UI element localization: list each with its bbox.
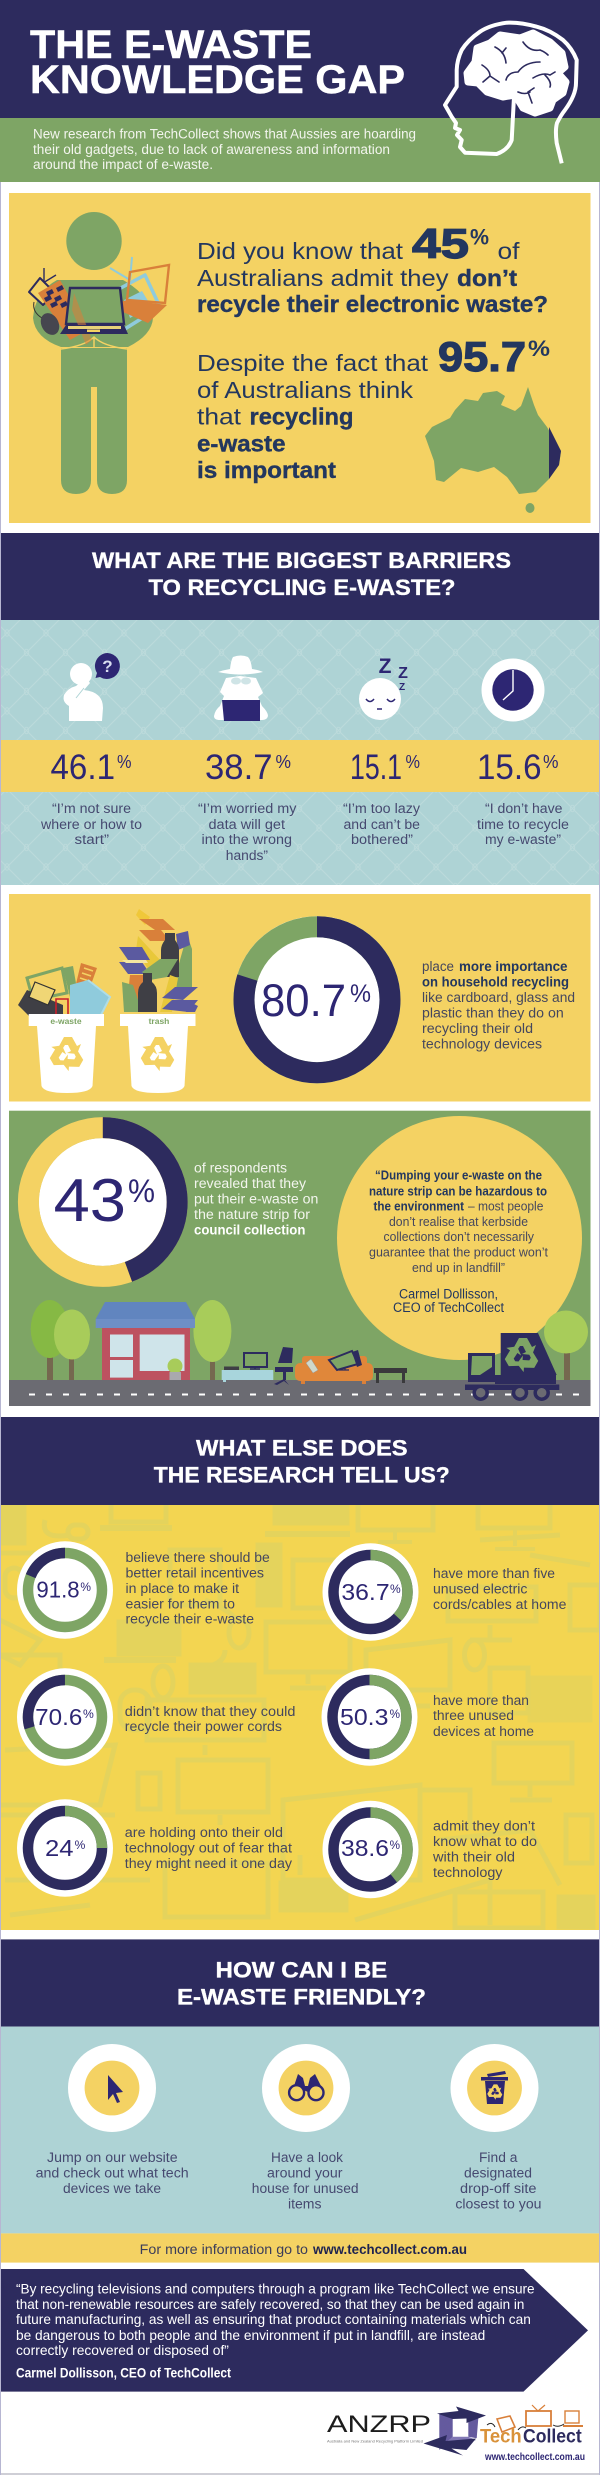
stat: 15.6	[477, 748, 569, 847]
caption: easier for them to	[126, 1596, 235, 1611]
quote: data will get	[208, 817, 285, 832]
caption: recycle their e-waste	[126, 1612, 254, 1627]
quote: time to recycle	[477, 817, 569, 832]
icon: sleeping face: Z	[379, 655, 392, 678]
icon: person wondering	[64, 653, 120, 721]
stat: 15.6: 15.6	[477, 748, 542, 787]
heading	[154, 1436, 450, 1488]
icon: sleeping face: Z	[398, 665, 408, 682]
callout: CEO quote: CEO of TechCollect	[393, 1300, 504, 1315]
step: drop-off: drop-off site	[460, 2181, 536, 2196]
icon: sleeping face	[359, 655, 408, 720]
heading band: what else	[0, 1417, 600, 1505]
text: 95.7 percent: Despite the fact that	[197, 350, 429, 376]
icon: sleeping face: Z	[399, 682, 405, 693]
stat: 50.3: %	[390, 1707, 400, 1721]
quote	[343, 801, 420, 847]
step: drop-off: closest to you	[455, 2196, 542, 2211]
logo: ANZRP: Australia and New Zealand Recycling Platform Limited	[327, 2440, 423, 2444]
icon: recycling bin	[450, 2044, 538, 2132]
step: website: Jump on our website	[47, 2150, 178, 2165]
heading: WHAT ELSE DOES	[196, 1436, 408, 1461]
caption: three unused	[433, 1708, 514, 1723]
text: 43 percent caption: put their e-waste on	[194, 1192, 318, 1207]
chart: 80.7 percent donut: %	[350, 980, 371, 1008]
icon: head with brain	[445, 23, 577, 163]
arrow: CEO quote	[0, 2269, 588, 2392]
quote: hands”	[226, 848, 268, 863]
dumped furniture	[222, 1347, 407, 1385]
caption	[433, 1693, 534, 1739]
icon: trash pile	[119, 909, 198, 1012]
text: 95.7 percent: recycling	[250, 404, 354, 430]
caption	[432, 1818, 537, 1880]
icon: trash bin	[120, 1014, 196, 1093]
map: Australia	[425, 387, 561, 513]
text: household recycling: more importance	[459, 959, 568, 974]
chart: 80.7 percent donut: 80.7	[261, 975, 346, 1026]
stat: 91.8: %	[80, 1580, 91, 1594]
intro text: around the impact of e-waste.	[33, 157, 213, 172]
intro text	[33, 126, 416, 172]
callout: CEO quote	[337, 1116, 582, 1360]
quote: my e-waste”	[485, 832, 561, 847]
step: drop-off	[450, 2044, 542, 2211]
text: household recycling: on household recycling	[422, 975, 569, 990]
stat: 15.1	[343, 748, 420, 847]
intro text: their old gadgets, due to lack of awareness and information	[33, 142, 390, 157]
text: 43 percent caption	[194, 1161, 318, 1238]
callout: CEO quote: nature strip can be hazardous to	[369, 1183, 547, 1198]
quote: where or how to	[40, 817, 142, 832]
panel: household recycling	[9, 894, 590, 1102]
heading: E-WASTE FRIENDLY?	[177, 1985, 426, 2010]
stat: 38.6: 38.6	[341, 1835, 389, 1861]
icon: person holding devices	[29, 212, 169, 494]
step: website: and check out what tech	[36, 2166, 189, 2180]
title: THE E-WASTE	[30, 23, 312, 67]
more information band: For more information go to	[140, 2242, 308, 2257]
panel: research findings	[0, 1498, 600, 1930]
arrow: CEO quote: “By recycling televisions and computers through a program like TechCollect we ensure	[16, 2281, 535, 2297]
caption: technology out of fear that	[125, 1840, 292, 1856]
caption: believe there should be	[126, 1550, 270, 1565]
stat: 70.6: 70.6	[35, 1704, 82, 1730]
step: drop-off: designated	[464, 2166, 532, 2180]
panel: how to help	[0, 2027, 600, 2233]
icon: e-waste bin: e-waste	[50, 1016, 82, 1026]
text: 43 percent caption: revealed that they	[194, 1176, 306, 1191]
stat band	[0, 740, 600, 792]
house	[96, 1302, 195, 1380]
icon: trash bin: trash	[149, 1016, 169, 1026]
stat: 38.7: 38.7	[205, 748, 272, 787]
heading: THE RESEARCH TELL US?	[154, 1463, 450, 1488]
icon: e-waste pile	[18, 963, 110, 1017]
logo: TechCollect: Tech	[480, 2427, 522, 2448]
text: 45 percent	[197, 220, 548, 317]
panel: barriers	[0, 620, 600, 885]
step: look around: items	[288, 2196, 322, 2211]
stat: 91.8: 91.8	[36, 1577, 80, 1603]
text: 95.7 percent: %	[528, 336, 550, 361]
caption	[433, 1566, 566, 1612]
stat: 36.7: 36.7	[341, 1579, 390, 1605]
icon: binoculars	[262, 2044, 350, 2132]
arrow: CEO quote: Carmel Dollisson, CEO of TechCollect	[16, 2365, 231, 2381]
text: household recycling: place	[422, 959, 454, 974]
caption: devices at home	[433, 1724, 534, 1739]
logo: TechCollect	[480, 2405, 585, 2463]
text: 45 percent: Australians admit they	[197, 265, 449, 291]
logo: ANZRP	[327, 2406, 486, 2456]
arrow: CEO quote: be dangerous to both people and the environment if put in landfill, are instead	[16, 2327, 485, 2343]
text: 45 percent: don’t	[457, 265, 517, 291]
text: 95.7 percent: is important	[197, 457, 336, 483]
quote: and can’t be	[344, 817, 420, 832]
caption: cords/cables at home	[433, 1597, 566, 1612]
caption: unused electric	[433, 1582, 528, 1597]
stat: 46.1: 46.1	[50, 748, 115, 787]
callout: CEO quote: – most people	[468, 1199, 543, 1214]
callout: CEO quote: guarantee that the product won’t	[369, 1245, 548, 1260]
chart: 43 percent donut: %	[128, 1173, 155, 1209]
arrow: CEO quote: that non-renewable resources are safely recovered, so that they can be used again in	[16, 2296, 524, 2312]
text: 95.7 percent: of Australians think	[197, 377, 413, 403]
icon: cursor	[68, 2044, 156, 2132]
icon: person wondering: ?	[102, 657, 113, 676]
quote	[40, 801, 142, 847]
stat: 38.7: %	[276, 752, 291, 772]
callout: CEO quote: collections don’t necessarily	[384, 1229, 534, 1244]
callout: CEO quote: the environment	[374, 1199, 465, 1214]
caption	[126, 1550, 270, 1627]
text: 43 percent caption: the nature strip for	[194, 1207, 311, 1222]
step: website: devices we take	[63, 2181, 161, 2196]
callout: CEO quote: Carmel Dollisson,	[399, 1286, 498, 1301]
text: household recycling: plastic than they do on	[422, 1006, 564, 1021]
icon: clock	[482, 658, 544, 722]
stat: 36.7: %	[390, 1582, 401, 1596]
stat: 24	[17, 1799, 292, 1897]
stat: 38.7	[198, 748, 297, 863]
heading: HOW CAN I BE	[216, 1958, 387, 1983]
step: website	[36, 2044, 189, 2196]
panel: did you know	[9, 193, 590, 523]
panel: nature strip	[9, 1111, 590, 1406]
heading: TO RECYCLING E-WASTE?	[148, 575, 456, 600]
heading band: e-waste friendly	[0, 1939, 600, 2027]
trees	[31, 1300, 588, 1380]
icon: hacker at laptop	[214, 656, 268, 721]
quote: “I don’t have	[485, 801, 562, 816]
caption: technology	[433, 1865, 503, 1880]
heading: WHAT ARE THE BIGGEST BARRIERS	[92, 548, 511, 573]
illustration: street scene	[9, 1300, 590, 1406]
quote: “I’m not sure	[52, 801, 131, 816]
text: household recycling: recycling their old	[422, 1021, 533, 1036]
caption	[125, 1704, 295, 1734]
text: household recycling	[422, 959, 575, 1052]
quote: “I’m too lazy	[343, 801, 420, 816]
quote: bothered”	[351, 832, 413, 847]
text: 45 percent: of	[498, 238, 520, 264]
quote	[477, 801, 569, 847]
stat: 46.1: %	[117, 752, 132, 772]
stat: 70.6: %	[83, 1707, 94, 1721]
truck	[465, 1333, 559, 1399]
step: look around: house for unused	[252, 2181, 359, 2196]
intro text: New research from TechCollect shows that Aussies are hoarding	[33, 126, 416, 142]
text: 45 percent: 45	[412, 220, 469, 267]
text: 95.7 percent: e-waste	[197, 430, 286, 456]
chart: 43 percent donut: 43	[54, 1167, 126, 1234]
quote	[198, 801, 297, 863]
text: 95.7 percent: 95.7	[438, 333, 526, 380]
text: 95.7 percent	[197, 333, 550, 483]
caption	[125, 1825, 292, 1871]
step: look around: Have a look	[271, 2150, 343, 2165]
logo: TechCollect: Collect	[523, 2427, 582, 2448]
quote: “I’m worried my	[198, 801, 297, 816]
stat: 24: %	[75, 1838, 86, 1852]
stat: 50.3	[322, 1668, 534, 1766]
text: 43 percent caption: of respondents	[194, 1161, 287, 1176]
caption: have more than	[433, 1693, 529, 1708]
caption: are holding onto their old	[125, 1825, 283, 1840]
logo: ANZRP: ANZRP	[327, 2411, 431, 2438]
stat: 36.7	[322, 1543, 566, 1641]
text: 45 percent: %	[470, 224, 489, 250]
stat: 24: 24	[45, 1835, 74, 1861]
header: title band	[0, 0, 600, 118]
caption: didn’t know that they could	[125, 1704, 295, 1719]
text: household recycling: like cardboard, glass and	[422, 990, 575, 1005]
step: look around: around your	[267, 2166, 343, 2180]
callout: CEO quote: don’t realise that kerbside	[389, 1214, 528, 1229]
heading	[177, 1958, 426, 2010]
stat: 38.6	[322, 1801, 537, 1898]
caption: they might need it one day	[125, 1856, 292, 1871]
title: KNOWLEDGE GAP	[30, 58, 405, 102]
stat: 46.1	[40, 748, 142, 847]
caption: admit they don’t	[433, 1818, 535, 1834]
step: drop-off: Find a	[479, 2150, 518, 2165]
arrow: CEO quote: future manufacturing, as well as ensuring that product containing materials which can	[16, 2311, 531, 2327]
stat: 15.1: %	[406, 752, 420, 772]
callout: CEO quote: end up in landfill”	[412, 1260, 505, 1275]
stat: 15.1: 15.1	[350, 748, 402, 787]
step: look around	[252, 2044, 359, 2211]
text: household recycling: technology devices	[422, 1037, 542, 1052]
title	[30, 23, 405, 102]
text: 43 percent caption: council collection	[194, 1223, 305, 1238]
arrow: CEO quote: correctly recovered or disposed of”	[16, 2342, 229, 2358]
caption: have more than five	[433, 1566, 555, 1581]
stat: 70.6	[17, 1668, 295, 1766]
callout: CEO quote: “Dumping your e-waste on the	[375, 1168, 542, 1183]
quote: start”	[74, 832, 109, 847]
caption: in place to make it	[126, 1581, 239, 1596]
quote: into the wrong	[202, 832, 292, 847]
stat: 91.8	[17, 1541, 270, 1639]
text: 45 percent: recycle their electronic waste?	[197, 291, 548, 317]
icon: e-waste bin	[29, 1014, 104, 1093]
chart: 43 percent donut	[28, 1128, 177, 1276]
caption: with their old	[432, 1850, 515, 1865]
more information band	[0, 2233, 600, 2263]
stat: 50.3: 50.3	[340, 1704, 388, 1730]
text: 95.7 percent: that	[197, 404, 242, 430]
heading band: biggest barriers	[0, 533, 600, 620]
caption: better retail incentives	[126, 1566, 264, 1581]
stat: 38.6: %	[390, 1838, 400, 1852]
caption: recycle their power cords	[125, 1719, 282, 1734]
more information band: www.techcollect.com.au	[312, 2242, 467, 2257]
heading	[92, 548, 511, 600]
text: 45 percent: Did you know that	[197, 238, 404, 264]
chart: 80.7 percent donut	[234, 916, 400, 1083]
intro band	[0, 118, 600, 182]
caption: know what to do	[433, 1834, 537, 1849]
stat: 15.6: %	[543, 752, 558, 772]
